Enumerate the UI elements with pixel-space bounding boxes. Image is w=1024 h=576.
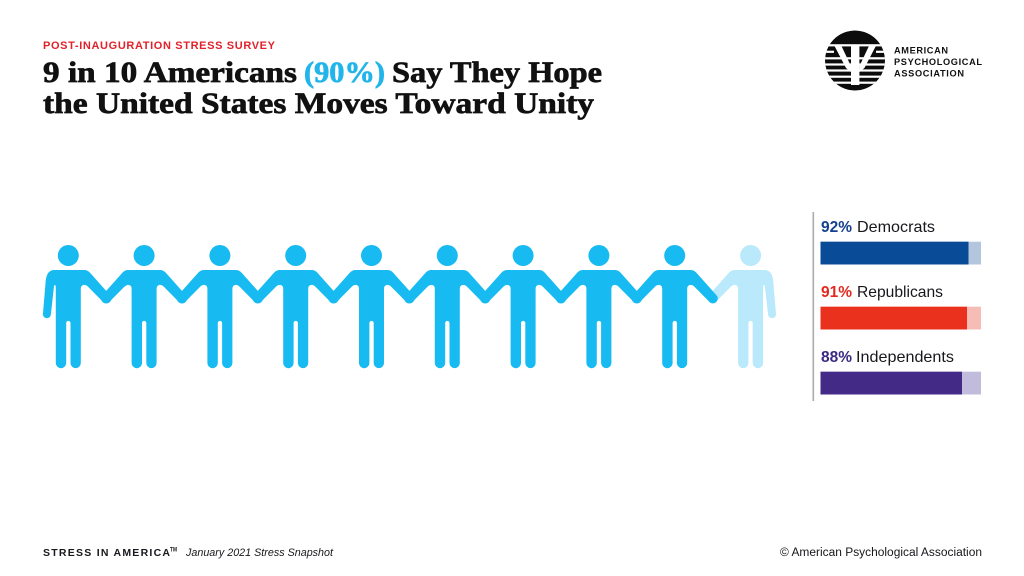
person 10 (light) <box>708 245 776 368</box>
logo wordmark: PSYCHOLOGICAL <box>894 57 982 67</box>
person 5 <box>328 245 415 368</box>
title: Say They Hope <box>392 56 602 89</box>
logo wordmark <box>894 46 982 78</box>
Republicans row: Republicans <box>857 284 943 301</box>
footer: copyright: © American Psychological Association <box>780 547 982 559</box>
Independents row: Independents <box>856 349 954 366</box>
chart: row of ten people holding hands, nine of ten highlighted <box>43 245 776 368</box>
Independents row <box>820 349 981 394</box>
title: the United States Moves Toward Unity <box>43 87 594 120</box>
person 7 <box>480 245 566 368</box>
footer: snapshot date: January 2021 Stress Snapshot <box>185 547 334 559</box>
panel: results by party <box>812 212 981 401</box>
person 8 <box>556 245 642 368</box>
logo wordmark: AMERICAN <box>894 46 948 56</box>
icon: striped psi circle <box>825 30 885 90</box>
logo wordmark: ASSOCIATION <box>894 68 964 78</box>
person 1 <box>43 245 111 368</box>
footer: series name: TM <box>170 548 177 554</box>
Democrats row: Democrats <box>857 219 935 236</box>
Democrats row <box>820 219 981 264</box>
footer: series name: STRESS IN AMERICA <box>43 547 170 559</box>
title <box>43 56 602 120</box>
person 4 <box>253 245 339 368</box>
logo: American Psychological Association <box>820 30 982 90</box>
Democrats row: 92% <box>821 219 852 236</box>
person 9 <box>632 245 718 368</box>
Independents row: 88% <box>821 349 852 366</box>
person 3 <box>177 245 263 368</box>
title: 9 in 10 Americans <box>43 56 297 89</box>
person 6 <box>404 245 490 368</box>
Republicans row: 91% <box>821 284 852 301</box>
heading: eyebrow: POST-INAUGURATION STRESS SURVEY <box>43 40 276 52</box>
title: (90%) <box>304 56 385 89</box>
Republicans row <box>820 284 981 330</box>
person 2 <box>101 245 187 368</box>
